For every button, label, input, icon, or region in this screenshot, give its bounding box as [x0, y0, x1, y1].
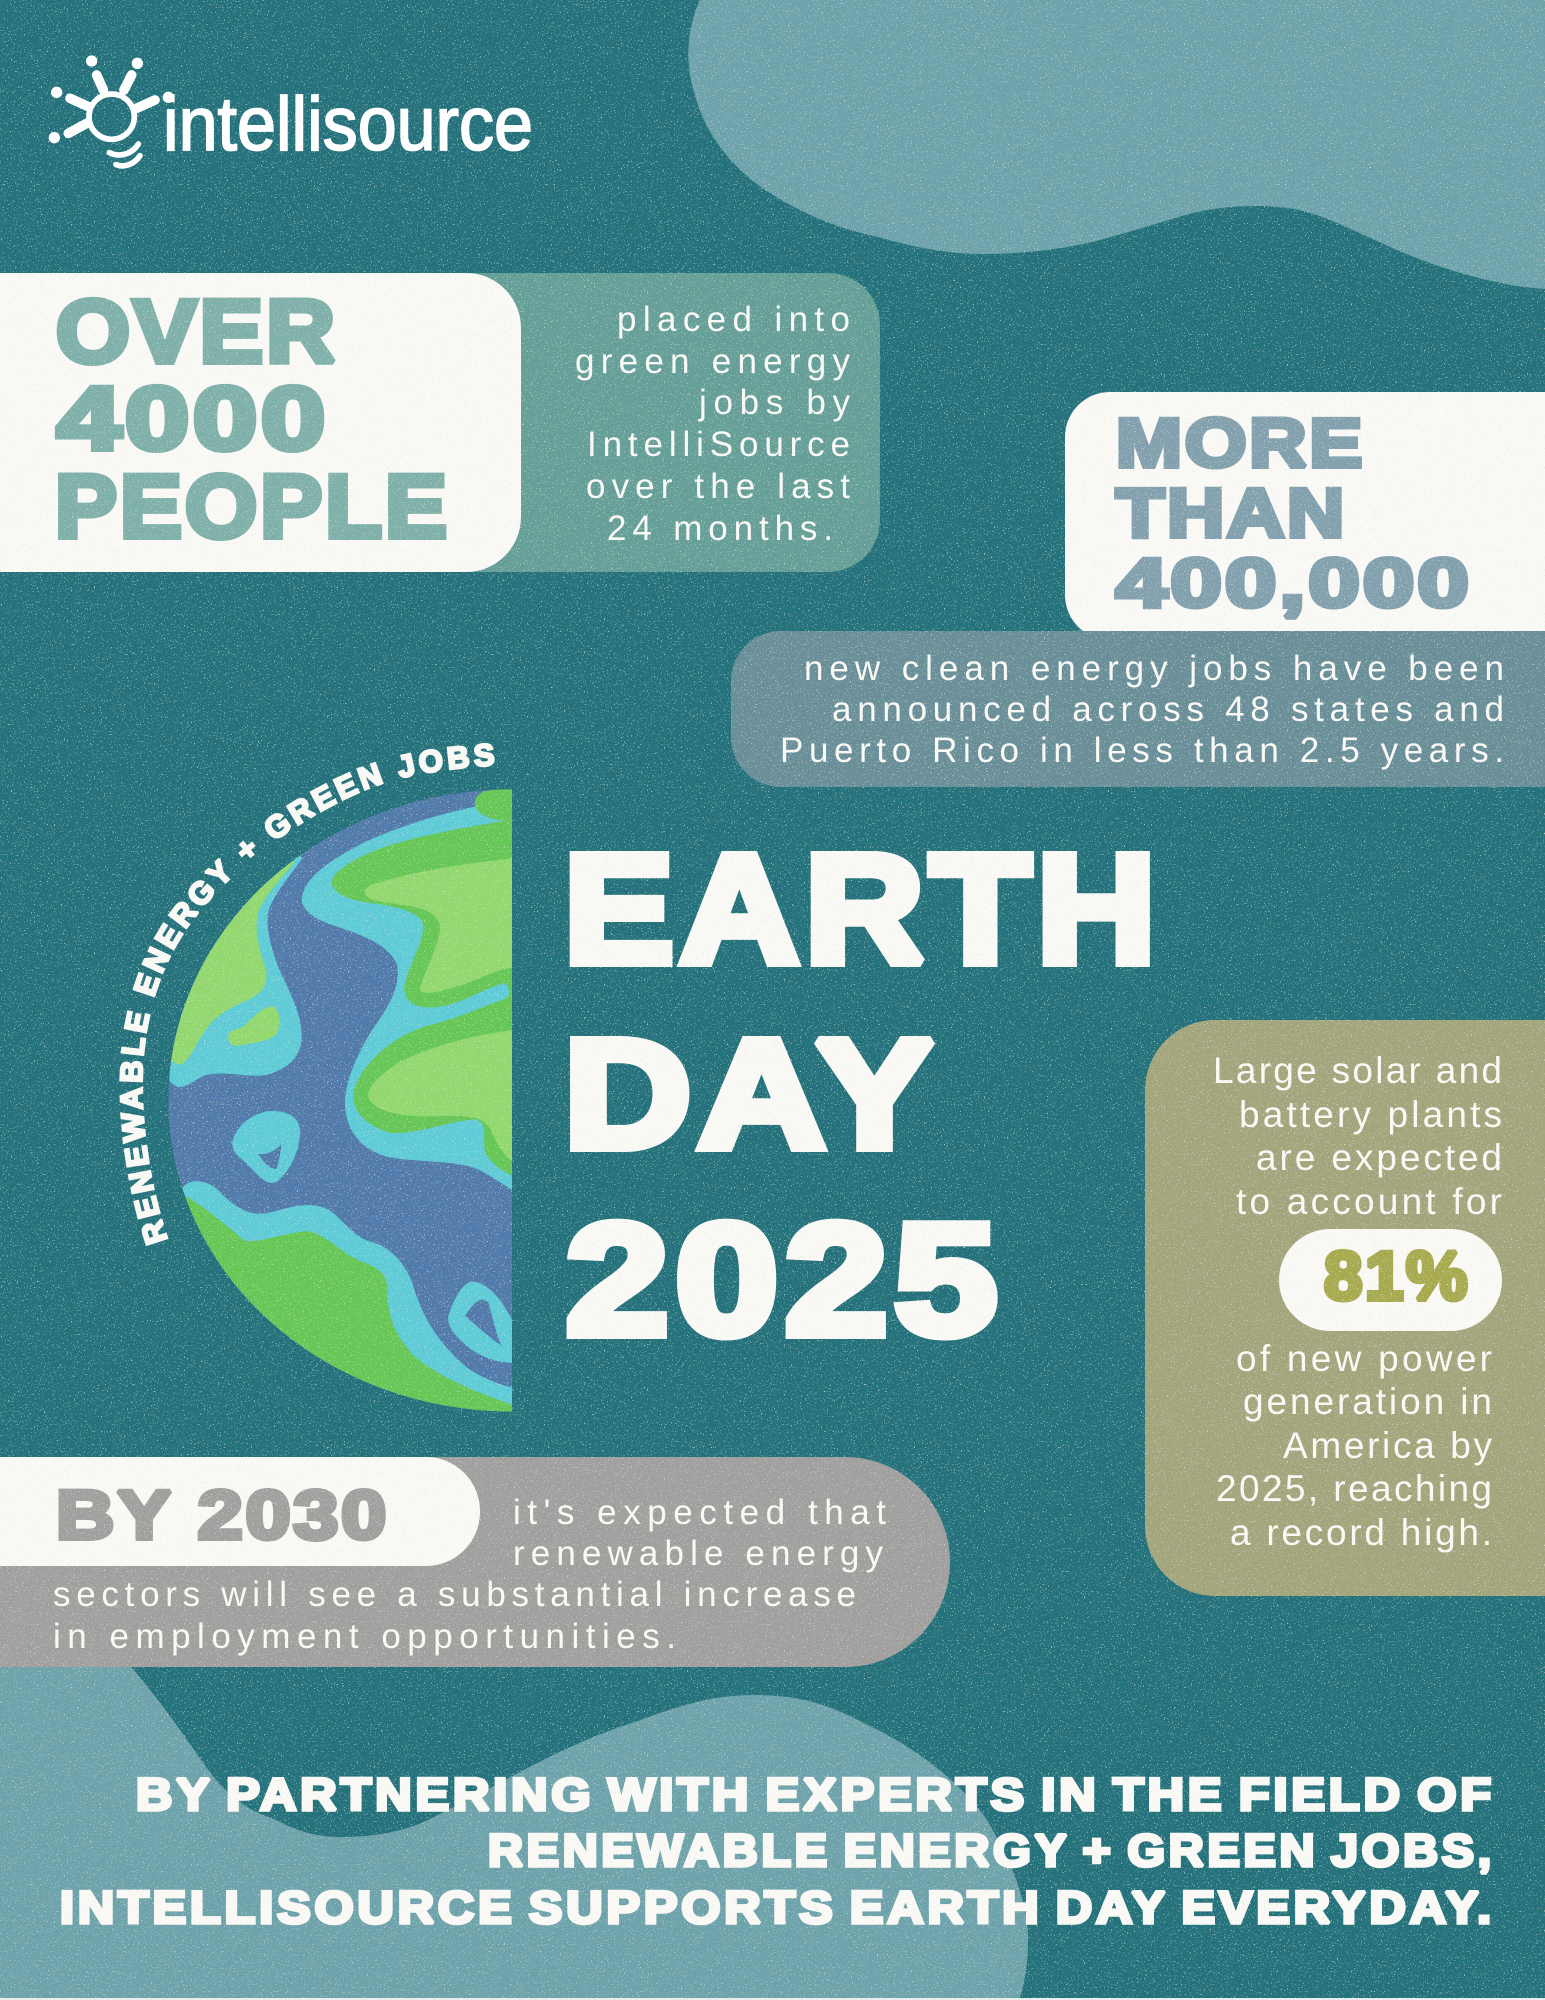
text: of new power generation: a record high. — [1230, 1512, 1492, 1553]
text: renewable energy sectors: sectors will see a substantial increase — [53, 1575, 856, 1614]
text: renewable energy sectors — [53, 1493, 886, 1656]
text: new clean energy jobs — [780, 649, 1504, 770]
panel: more than 400,000 — [731, 392, 1545, 787]
panel: solar and battery 81% — [1145, 1020, 1545, 1596]
upper continent edge — [332, 819, 513, 1007]
text: placed into green energy jobs: 24 months. — [607, 509, 833, 548]
globe illustration — [150, 783, 513, 1434]
title: earth day 2025: EARTH — [564, 823, 1162, 995]
background blob: bottom left — [0, 1660, 1028, 1998]
panel background: olive — [1145, 1020, 1545, 1596]
text: new clean energy jobs: Puerto Rico in less than 2.5 years. — [780, 731, 1504, 770]
closing statement: BY PARTNERING WITH EXPERTS IN THE FIELD OF — [136, 1769, 1495, 1820]
text: large solar and battery plants: battery plants — [1239, 1094, 1502, 1135]
panel background: white — [0, 273, 521, 572]
central lake — [232, 1111, 300, 1183]
text: large solar and battery plants — [1213, 1050, 1502, 1222]
panel background: blue grey — [731, 631, 1545, 787]
panel: by 2030 — [0, 1457, 950, 1667]
panel background: green — [0, 273, 880, 572]
upper left island — [228, 1007, 280, 1046]
panel background: white — [0, 1457, 480, 1566]
text: of new power generation — [1216, 1338, 1492, 1553]
title: earth day 2025: 2025 — [566, 1192, 1004, 1368]
logo: intellisource — [49, 55, 533, 167]
southern water — [180, 1181, 513, 1416]
text: placed into green energy jobs: IntelliSource — [587, 425, 850, 464]
north cap land — [475, 787, 513, 821]
ocean — [163, 783, 513, 1416]
heading: more than 400,000: THAN — [1116, 474, 1347, 552]
text: of new power generation: America by — [1283, 1425, 1492, 1466]
heading: over 4000 people: OVER — [56, 281, 338, 381]
heading: more than 400,000 — [1116, 404, 1472, 622]
text: large solar and battery plants: are expected — [1256, 1137, 1502, 1178]
text: new clean energy jobs: announced across 48 states and — [832, 690, 1504, 729]
southern land — [186, 1196, 512, 1412]
closing statement: RENEWABLE ENERGY + GREEN JOBS, — [488, 1825, 1495, 1876]
closing statement: INTELLISOURCE SUPPORTS EARTH DAY EVERYDAY. — [60, 1882, 1495, 1933]
text: placed into green energy jobs: green energy — [575, 342, 850, 381]
text: placed into green energy jobs — [575, 300, 850, 548]
heading: by 2030: BY 2030 — [56, 1476, 389, 1554]
south right island — [448, 1282, 513, 1363]
background blob: top right — [688, 0, 1545, 289]
closing statement — [60, 1769, 1495, 1933]
text: new clean energy jobs: new clean energy jobs have been — [804, 649, 1504, 688]
panel background: grey — [0, 1457, 950, 1667]
upper left coast water — [163, 850, 302, 1087]
stat pill: 81% — [1279, 1229, 1502, 1331]
right continent water — [302, 799, 513, 1191]
text: renewable energy sectors: renewable energy — [513, 1534, 884, 1573]
upper left land — [171, 861, 294, 1065]
curved caption: renewable energy + green jobs: RENEWABLE ENERGY + GREEN JOBS — [119, 742, 495, 1246]
lower continent edge — [353, 979, 513, 1176]
text: large solar and battery plants: to account for — [1236, 1181, 1502, 1222]
title: earth day 2025: DAY — [564, 1008, 940, 1180]
stat pill: 81%: 81% — [1324, 1238, 1470, 1314]
text: renewable energy sectors: in employment opportunities. — [53, 1617, 676, 1656]
lower continent land — [368, 1030, 513, 1162]
text: of new power generation: of new power — [1236, 1338, 1492, 1379]
text: of new power generation: generation in — [1243, 1381, 1492, 1422]
heading: over 4000 people: PEOPLE — [55, 456, 450, 556]
panel: over 4000 people — [0, 273, 880, 572]
heading: more than 400,000: 400,000 — [1116, 544, 1472, 622]
text: placed into green energy jobs: over the last — [586, 467, 850, 506]
icon: sun light bulb — [49, 55, 174, 166]
heading: over 4000 people — [55, 281, 450, 556]
heading: over 4000 people: 4000 — [57, 368, 329, 468]
text: large solar and battery plants: Large solar and — [1213, 1050, 1502, 1091]
text: of new power generation: 2025, reaching — [1216, 1468, 1492, 1509]
title: earth day 2025 — [564, 823, 1162, 1368]
panel background: white — [1065, 392, 1545, 640]
text: placed into green energy jobs: placed into — [617, 300, 850, 339]
heading: more than 400,000: MORE — [1116, 404, 1365, 482]
wordmark: intellisource — [163, 82, 533, 167]
text: placed into green energy jobs: jobs by — [698, 383, 850, 422]
text: renewable energy sectors: it's expected that — [513, 1493, 886, 1532]
upper continent land — [365, 858, 513, 993]
